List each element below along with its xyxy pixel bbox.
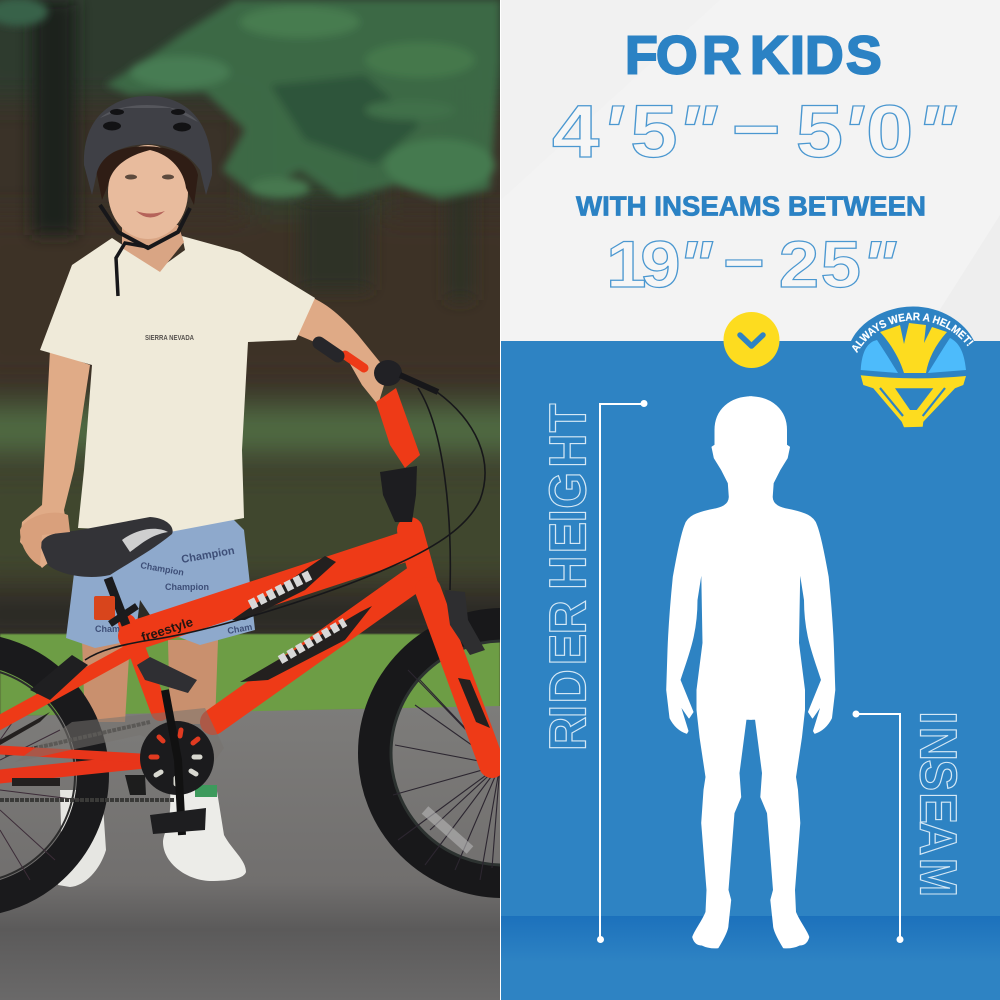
left arm <box>20 350 90 568</box>
height range outlined: 5'0" <box>796 90 956 173</box>
height range outlined: 4'5" <box>552 90 717 173</box>
shirt print: SIERRA NEVADA <box>145 333 194 342</box>
icon: always wear a helmet badge <box>851 306 974 428</box>
inseam label: INSEAM <box>909 711 968 897</box>
seat post and reflector <box>94 578 137 625</box>
inseam range outlined: – <box>724 221 764 295</box>
shorts <box>66 518 255 648</box>
rear wheel <box>0 649 93 901</box>
foliage <box>0 0 500 200</box>
height range outlined: – <box>733 83 780 166</box>
inseam measure line <box>852 710 904 943</box>
chainring and cranks <box>15 657 224 835</box>
forest background <box>0 0 530 720</box>
panel: light header background <box>501 0 1000 341</box>
neck and face <box>122 225 184 272</box>
hand on seat <box>20 513 70 566</box>
t-shirt <box>40 236 315 532</box>
shorts print: Champ <box>95 624 126 634</box>
legs <box>82 640 130 722</box>
right shoe <box>163 785 246 881</box>
front wheel <box>358 608 500 898</box>
asphalt path <box>0 706 500 1000</box>
floor band <box>501 916 1000 1000</box>
shorts print: Cham <box>227 622 253 636</box>
boy <box>20 96 388 887</box>
rider height measure line <box>597 400 648 943</box>
panel: blue sizing area <box>501 341 1000 1000</box>
shorts print: Champion <box>180 545 236 566</box>
inseam range outlined: 25" <box>779 227 896 301</box>
badge text: ALWAYS WEAR A HELMET! <box>852 312 974 354</box>
frame decals: freestyle <box>139 614 195 645</box>
brake cables <box>85 388 485 660</box>
red handlebar <box>376 388 420 468</box>
panel: photo of boy with red bike <box>0 0 500 1000</box>
shorts print: Champion <box>140 560 185 578</box>
shorts print: Champion <box>165 582 209 592</box>
right arm <box>298 295 388 405</box>
front brake <box>445 590 485 655</box>
heading: for kids: FOR KIDS <box>625 26 882 86</box>
subheading: with inseams between: WITH INSEAMS BETWEEN <box>576 190 926 222</box>
shorts print <box>95 545 253 636</box>
handlebar grips and stem <box>319 343 438 522</box>
rider height label: RIDER HEIGHT <box>538 403 597 751</box>
grass strip <box>0 634 500 716</box>
child silhouette <box>667 397 835 948</box>
icon: yellow chevron button <box>724 312 780 368</box>
inseam range outlined: 19" <box>606 227 712 301</box>
red bike frame <box>0 355 492 777</box>
face details <box>125 174 174 218</box>
chain <box>0 722 175 800</box>
frame decals <box>0 556 490 786</box>
helmet <box>84 96 212 296</box>
bike seat <box>40 517 173 577</box>
left shoe <box>58 790 106 887</box>
rear brake <box>30 655 88 700</box>
